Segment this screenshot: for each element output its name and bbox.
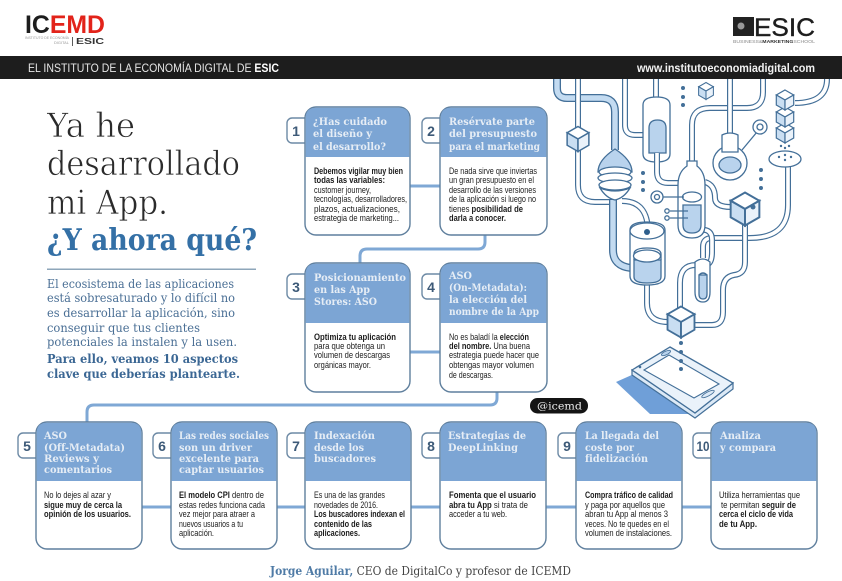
step 1 <box>287 107 410 235</box>
step 6: vez mejor para atraer a <box>179 509 256 519</box>
step 7: Los buscadores indexan el <box>314 509 405 519</box>
dots and rings <box>641 86 763 220</box>
step 6 <box>153 422 277 549</box>
step 2: para el marketing <box>449 141 541 153</box>
step 1: customer journey, <box>314 185 371 195</box>
step 4: la elección del <box>449 294 527 306</box>
cylinder with beaker <box>630 222 665 285</box>
step 1: todas las variables: <box>314 175 385 185</box>
step 6: El modelo CPI dentro de <box>179 490 264 500</box>
step 3: orgánicas mayor. <box>314 360 371 370</box>
step 4: de descargas. <box>449 370 493 380</box>
step 3 <box>287 263 410 392</box>
step 3: 3 <box>292 279 300 295</box>
step 6: excelente para <box>179 453 259 465</box>
step 4: (On-Metadata): <box>449 282 527 294</box>
step 7: novedades de 2016. <box>314 500 378 510</box>
step 8: acceder a tu web. <box>449 509 507 519</box>
step 2: del presupuesto <box>449 128 537 140</box>
bottom cube <box>668 306 694 338</box>
step 3: Posicionamiento <box>314 272 406 284</box>
funnel with dots <box>769 145 801 167</box>
step 1: el desarrollo? <box>313 141 386 153</box>
step 5: opinión de los usuarios. <box>44 509 131 519</box>
step 1: 1 <box>292 123 300 139</box>
step 6: 6 <box>158 438 166 454</box>
cube with hole <box>731 192 759 226</box>
step 4: estrategia puede hacer que <box>449 350 539 360</box>
intro text: está sobresaturado y lo difícil no <box>47 291 235 305</box>
step 4: 4 <box>427 279 435 295</box>
step 4: ASO <box>448 270 472 282</box>
step 9: abran tu App al menos 3 <box>585 509 668 519</box>
ribbed flask <box>598 149 632 200</box>
logo: ESIC: BUSINESS& MARKETING SCHOOL <box>733 39 815 44</box>
step 3: volumen de descargas <box>314 350 390 360</box>
logo: ICEMD: ESIC <box>76 37 104 46</box>
step 10: Utiliza herramientas que <box>719 490 800 500</box>
step 5: comentarios <box>44 464 112 476</box>
pipes <box>557 79 827 325</box>
step 7: contenido de las <box>314 519 372 529</box>
step 8: Estrategias de <box>448 430 526 442</box>
header bar: www.institutoeconomiadigital.com <box>636 61 815 75</box>
intro text <box>47 277 240 381</box>
dots above the phone <box>679 341 683 371</box>
step 6: son un driver <box>179 442 252 454</box>
step 2: De nada sirve que inviertas <box>449 166 537 176</box>
intro text: clave que deberías plantearte. <box>47 367 240 381</box>
logo: ICEMD: ICEMD <box>25 11 105 39</box>
step 1: estrategia de marketing... <box>314 213 399 223</box>
logo: ESIC: ESIC <box>754 14 815 42</box>
step 8: 8 <box>427 438 435 454</box>
bottle <box>678 161 705 238</box>
step 4: nombre de la App <box>449 306 539 318</box>
step 9: La llegada del <box>585 430 659 442</box>
logo: ESIC <box>733 14 815 44</box>
step 9 <box>558 422 682 549</box>
round flask <box>713 120 767 180</box>
step 10: y compara <box>719 442 776 454</box>
intro text: potenciales la instalen y la usen. <box>47 335 237 349</box>
logo: ICEMD: INSTITUTO DE ECONOMÍA <box>25 36 70 40</box>
step 9: Compra tráfico de calidad <box>585 490 673 500</box>
step 5: ASO <box>43 430 67 442</box>
step 4: del nombre. Una buena <box>449 341 531 351</box>
step 9: veces. No te quedes en el <box>585 519 669 529</box>
handle: @icemd <box>530 398 588 414</box>
cube stack <box>776 90 794 143</box>
step 10: de tu App. <box>719 519 757 529</box>
step 3: Optimiza tu aplicación <box>314 332 396 342</box>
step 1: el diseño y <box>313 128 373 140</box>
test tube <box>695 259 710 302</box>
step 2: 2 <box>427 123 435 139</box>
step 7: Indexación <box>314 430 375 442</box>
cylinder outlet pipe <box>657 153 680 183</box>
step 5: sigue muy de cerca la <box>44 500 123 510</box>
step 7: desde los <box>314 442 364 454</box>
step 8 <box>422 422 546 549</box>
step 1: Debemos vigilar muy bien <box>314 166 403 176</box>
step 10: te permitan seguir de <box>721 500 796 510</box>
connector path between steps <box>87 186 711 507</box>
step 6: Las redes sociales <box>179 430 269 442</box>
step 2: Resérvate parte <box>449 116 535 128</box>
step 9: fidelización <box>585 453 648 465</box>
step 9: 9 <box>563 438 571 454</box>
intro text: es desarrollar la aplicación, sino <box>47 306 235 320</box>
step 10: cerca el ciclo de vida <box>719 509 794 519</box>
intro text: conseguir que tus clientes <box>47 321 200 335</box>
step 2: tienes posibilidad de <box>449 204 523 214</box>
step 5: 5 <box>23 438 31 454</box>
step 6: nuevos usuarios a tu <box>179 519 243 529</box>
illustration: lab pipes leading to a phone <box>557 79 827 418</box>
intro text: Para ello, veamos 10 aspectos <box>47 352 238 366</box>
step 6: estas redes funciona cada <box>179 500 266 510</box>
tall cylinder <box>643 97 670 162</box>
author credit: Jorge Aguilar, CEO de DigitalCo y profesor de ICEMD <box>269 564 571 578</box>
step 1: plazos, actualizaciones, <box>314 204 400 214</box>
step 5 <box>18 422 142 549</box>
header bar <box>0 56 842 79</box>
step 1: ¿Has cuidado <box>313 116 387 128</box>
step 4 <box>422 263 547 392</box>
step 5: (Off-Metadata) <box>44 442 125 454</box>
step 7: aplicaciones. <box>314 528 360 538</box>
step 4: obtengas mayor volumen <box>449 360 534 370</box>
step 3: para que obtenga un <box>314 341 385 351</box>
step 8: DeepLinking <box>448 442 519 454</box>
step 9: y paga por aquellos que <box>585 500 665 510</box>
intro text: El ecosistema de las aplicaciones <box>47 277 234 291</box>
step 10 <box>693 422 817 549</box>
step 2: darla a conocer. <box>449 213 506 223</box>
title: desarrollado <box>47 144 240 184</box>
step 2: un gran presupuesto en el <box>449 175 534 185</box>
step 8: Fomenta que el usuario <box>449 490 536 500</box>
step 4: No es baladí la elección <box>449 332 529 342</box>
step 7: 7 <box>292 438 300 454</box>
title: ¿Y ahora qué? <box>47 223 257 258</box>
phone <box>616 347 733 418</box>
handle: @icemd: @icemd <box>537 400 582 412</box>
step 6: aplicación. <box>179 528 214 538</box>
step 5: Reviews y <box>44 453 100 465</box>
step 6: captar usuarios <box>179 464 264 476</box>
step 10: Analiza <box>719 430 761 442</box>
title rule <box>47 268 256 270</box>
cube left <box>567 126 589 152</box>
small cube <box>699 82 713 100</box>
step 7 <box>287 422 411 549</box>
header bar: EL INSTITUTO DE LA ECONOMÍA DIGITAL DE ESIC <box>28 60 279 75</box>
step 3: Stores: ASO <box>314 296 377 308</box>
step 10: 10 <box>696 438 710 454</box>
step 7: buscadores <box>314 453 376 465</box>
step 5: No lo dejes al azar y <box>44 490 111 500</box>
step 7: Es una de las grandes <box>314 490 385 500</box>
title: Ya he <box>46 106 135 146</box>
step 3: en las App <box>314 284 370 296</box>
title: mi App. <box>47 183 168 223</box>
step 1: tecnologías, desarrolladores, <box>314 194 407 204</box>
step 2: desarrollo de las versiones <box>449 185 536 195</box>
step 2 <box>422 107 547 235</box>
title <box>46 106 257 258</box>
step 8: abra tu App si trata de <box>449 500 528 510</box>
step 9: coste por <box>585 442 634 454</box>
step 9: volumen de instalaciones. <box>585 528 672 538</box>
step 2: de la aplicación si luego no <box>449 194 536 204</box>
logo: ICEMD: DIGITAL <box>54 41 69 45</box>
